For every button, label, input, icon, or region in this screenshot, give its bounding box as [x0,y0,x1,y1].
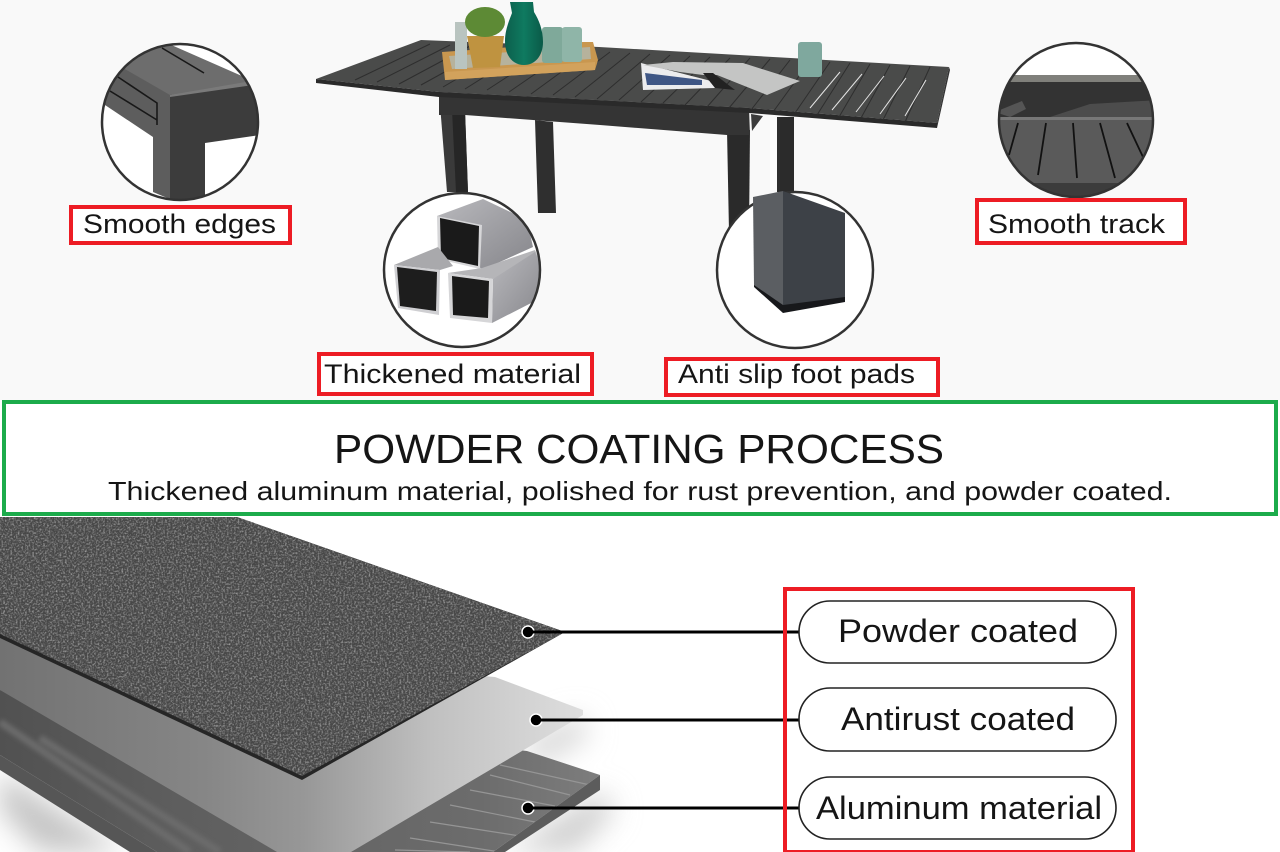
detail circle: table corner [90,40,260,200]
pill: powder coated [799,601,1116,663]
detail circle: table leg foot [717,191,873,348]
tray with plant, vase and glasses [442,2,598,80]
soft shadows [0,715,615,852]
layered material diagram [0,517,800,852]
heading panel: powder coating process [4,402,1276,514]
marker: aluminum material [522,802,534,814]
feature: anti slip foot pads [666,191,938,395]
background: upper product area [0,0,1280,400]
table apron [439,92,750,135]
detail circle: square aluminium tubes [384,193,545,347]
pill: antirust coated: Antirust coated [841,701,1075,737]
layer: antirust coating [0,637,583,852]
layer: powder coating [0,517,565,780]
open magazine [641,62,800,95]
label box: Smooth edges [83,209,276,239]
feature: thickened material [319,193,592,394]
title: POWDER COATING PROCESS [334,426,944,472]
pill: powder coated: Powder coated [838,613,1078,649]
label box [666,359,938,395]
table slats [355,44,930,122]
table legs [439,92,794,232]
pill: aluminum material: Aluminum material [816,790,1102,826]
label box [71,207,290,243]
table top [316,40,949,123]
label box: Thickened material [324,359,581,389]
detail circle: sliding track [998,42,1154,198]
label box [319,354,592,394]
marker: antirust coated [530,714,542,726]
subtitle: Thickened aluminum material, polished for rust prevention, and powder coated. [108,476,1172,506]
product photo: extendable dining table [316,2,950,232]
marker: powder coated [522,626,534,638]
pill: antirust coated [799,688,1116,751]
label box: Smooth track [988,209,1166,239]
legend panel: layers [785,589,1133,852]
pill: aluminum material [799,777,1116,839]
layer: aluminum material [0,690,600,852]
feature: smooth edges [71,40,290,243]
label box [977,200,1185,243]
feature: smooth track [977,43,1185,243]
leader lines [533,632,800,808]
drinking glass [798,42,822,77]
label box: Anti slip foot pads [678,359,915,389]
